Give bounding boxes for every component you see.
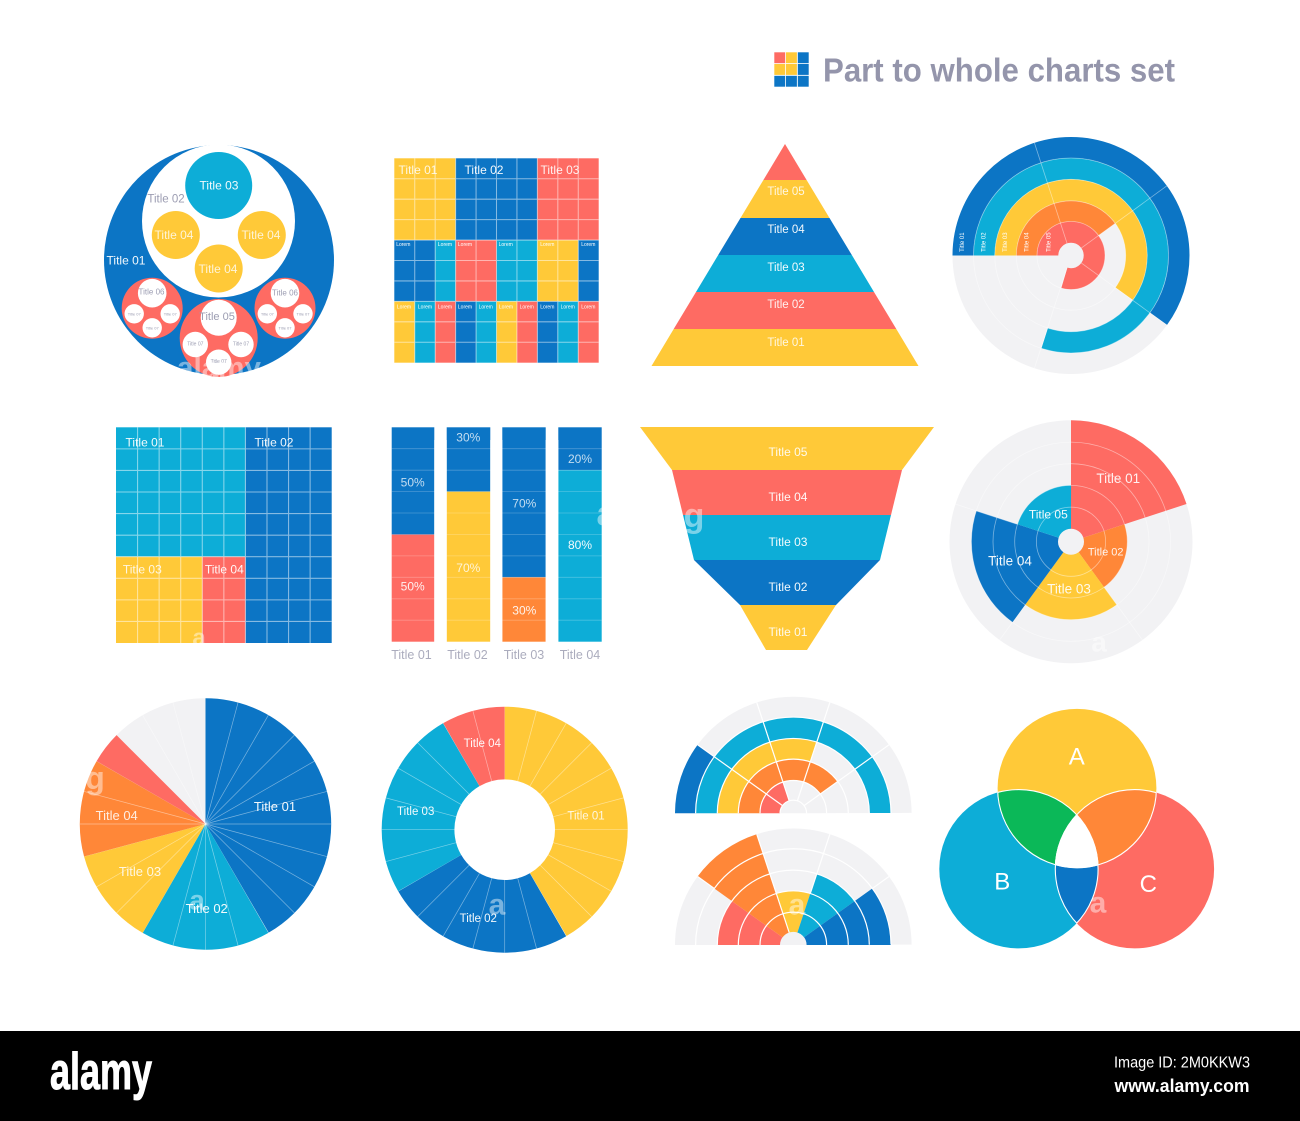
watermark fragments: alamy <box>177 352 261 384</box>
header: icon and title <box>774 52 1175 88</box>
polar labels: Title 01 <box>1096 471 1140 486</box>
polar labels: Title 03 <box>1047 582 1091 597</box>
pie labels <box>96 799 296 916</box>
funnel labels: Title 01 <box>769 625 808 639</box>
funnel labels <box>769 445 808 639</box>
panel: square treemap <box>116 427 332 643</box>
treemap labels: Lorem <box>418 304 432 310</box>
footer image id: Image ID: 2M0KKW3 <box>1114 1054 1250 1072</box>
funnel labels: Title 02 <box>769 580 808 594</box>
treemap labels: Lorem <box>396 242 410 248</box>
circle labels: Title 07 <box>128 311 141 316</box>
pyramid labels: Title 03 <box>767 262 805 274</box>
panel: donut chart <box>382 711 628 953</box>
bar: title 02: 70% <box>456 561 481 575</box>
polar labels: Title 05 <box>1029 507 1068 521</box>
circle labels: Title 05 <box>199 311 235 323</box>
treemap labels: Lorem <box>581 304 595 310</box>
watermark fragments: a <box>192 624 206 652</box>
bar: title 04 <box>558 427 602 662</box>
watermark fragments: a <box>1091 626 1107 658</box>
watermark fragments <box>85 352 1107 922</box>
treemap labels: Title 03 <box>541 163 580 177</box>
circle labels: Title 01 <box>107 254 146 268</box>
bar: title 04: 80% <box>568 538 592 552</box>
treemap labels: Title 02 <box>465 163 504 177</box>
circle labels: Title 07 <box>164 311 177 316</box>
treemap labels: Lorem <box>540 242 554 248</box>
square treemap labels: Title 03 <box>123 562 162 576</box>
venn labels: B <box>994 868 1010 896</box>
watermark fragments: a <box>489 888 506 922</box>
panel: polar area chart <box>950 420 1192 663</box>
circle labels: Title 02 <box>147 194 185 206</box>
donut labels: Title 02 <box>460 913 497 925</box>
footer logo: alamy <box>50 1043 152 1101</box>
square treemap labels: Title 02 <box>255 435 294 449</box>
watermark fragments: a <box>189 884 205 916</box>
treemap labels <box>396 163 595 310</box>
circle labels <box>107 178 310 365</box>
pyramid labels: Title 04 <box>767 224 805 236</box>
title: Part to whole charts set <box>823 52 1175 88</box>
pie labels: Title 03 <box>119 864 161 879</box>
circle labels: Title 07 <box>187 342 204 348</box>
polar labels <box>988 471 1140 596</box>
watermark fragments: a <box>1090 886 1107 920</box>
treemap labels: Lorem <box>581 242 595 248</box>
donut labels <box>397 738 605 925</box>
panel: marimekko treemap <box>394 158 599 363</box>
radial bar labels: Title 03 <box>1003 232 1009 252</box>
panel: pie chart <box>80 703 331 950</box>
bar: title 03: 30% <box>512 604 537 618</box>
circle labels: Title 03 <box>200 178 239 192</box>
bar: title 02: Title 02 <box>447 648 488 662</box>
treemap labels: Lorem <box>458 242 472 248</box>
watermark fragments: g <box>684 497 704 535</box>
pyramid labels: Title 02 <box>767 299 805 311</box>
icon: colour grid <box>774 52 809 87</box>
circle labels: Title 04 <box>242 228 281 242</box>
panel: nested circle packing chart <box>104 144 334 377</box>
donut labels: Title 01 <box>567 811 605 823</box>
circle labels: Title 04 <box>155 228 194 242</box>
square treemap labels: Title 04 <box>205 562 244 576</box>
polar labels: Title 04 <box>988 554 1032 569</box>
circle labels: Title 06 <box>139 288 165 297</box>
circle labels: Title 06 <box>272 288 299 297</box>
treemap labels: Lorem <box>561 304 575 310</box>
panel: funnel chart <box>640 427 934 650</box>
circle labels: Title 07 <box>261 311 275 316</box>
pie labels: Title 01 <box>254 799 296 814</box>
panel: radial bar chart <box>952 137 1190 374</box>
panel: lower semicircle polar chart <box>696 834 891 1041</box>
bar: title 01: Title 01 <box>391 648 432 662</box>
treemap labels: Lorem <box>499 304 513 310</box>
circle labels: Title 07 <box>233 342 249 348</box>
square treemap labels <box>123 435 294 576</box>
panel: stacked bars <box>391 427 602 662</box>
watermark fragments: a <box>597 495 617 533</box>
pyramid labels: Title 01 <box>767 337 805 349</box>
radial bar labels: Title 02 <box>982 232 988 252</box>
watermark fragments: a <box>789 888 806 922</box>
bar: title 01: 50% <box>401 475 425 489</box>
treemap labels: Lorem <box>397 304 411 310</box>
circle labels: Title 07 <box>211 359 227 365</box>
bar: title 04: Title 04 <box>560 648 600 662</box>
bar: title 02 <box>447 427 490 662</box>
treemap labels: Lorem <box>499 242 513 248</box>
treemap labels: Lorem <box>540 304 554 310</box>
bar: title 04: 20% <box>568 452 592 466</box>
funnel labels: Title 04 <box>769 490 808 504</box>
panel: upper semicircle radial bars <box>685 702 901 920</box>
panel: pyramid chart <box>652 144 918 366</box>
pyramid labels: Title 05 <box>767 186 805 198</box>
radial bar labels <box>960 232 1052 252</box>
bar: title 01 <box>391 427 434 662</box>
watermark fragments: g <box>85 760 105 796</box>
circle labels: Title 07 <box>279 325 292 330</box>
treemap labels: Lorem <box>520 304 534 310</box>
pie labels: Title 02 <box>186 901 228 916</box>
polar labels: Title 02 <box>1088 546 1124 558</box>
radial bar labels: Title 04 <box>1025 232 1031 252</box>
donut labels: Title 03 <box>397 806 434 818</box>
venn labels: C <box>1140 871 1157 898</box>
circle labels: Title 07 <box>146 325 159 330</box>
bar: title 03: Title 03 <box>504 648 544 662</box>
footer: alamy bar <box>0 1031 1300 1121</box>
bar: title 01: 50% <box>401 580 425 594</box>
radial bar labels: Title 05 <box>1046 232 1052 252</box>
circle labels: Title 04 <box>199 262 238 276</box>
footer url: www.alamy.com <box>1114 1076 1250 1096</box>
treemap labels: Lorem <box>438 304 452 310</box>
circle labels: Title 07 <box>297 311 310 316</box>
bar: title 03: 70% <box>512 496 537 510</box>
venn labels: A <box>1069 744 1085 770</box>
funnel labels: Title 05 <box>769 445 808 459</box>
donut labels: Title 04 <box>464 738 502 750</box>
treemap labels: Title 01 <box>399 163 438 177</box>
pyramid labels <box>767 186 805 349</box>
pie labels: Title 04 <box>96 808 138 823</box>
bar: title 03 <box>502 427 546 662</box>
treemap labels: Lorem <box>479 304 493 310</box>
treemap labels: Lorem <box>438 242 452 248</box>
treemap labels: Lorem <box>458 304 472 310</box>
funnel labels: Title 03 <box>769 535 808 549</box>
bar: title 02: 30% <box>456 431 481 445</box>
panel: venn diagram <box>939 709 1214 948</box>
square treemap labels: Title 01 <box>126 435 165 449</box>
venn labels <box>994 744 1157 898</box>
radial bar labels: Title 01 <box>960 232 966 252</box>
